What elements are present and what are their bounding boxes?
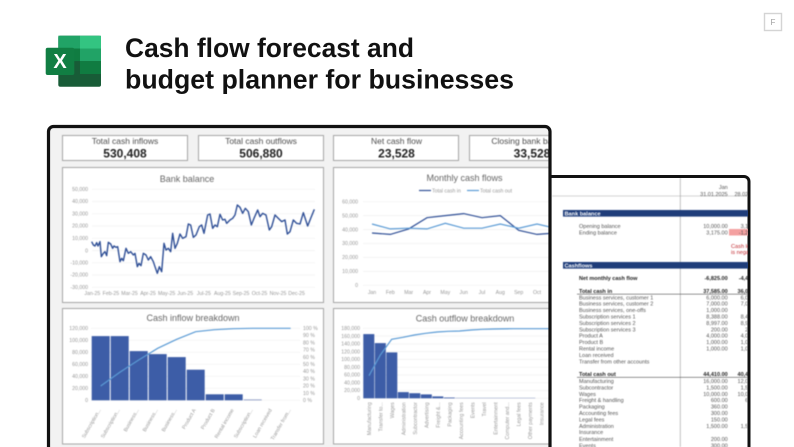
chart: bank balance line: Jul-25 (197, 291, 211, 297)
chart: monthly cash flows: Monthly cash flows (426, 173, 503, 183)
chart: cash inflow breakdown: Loan received (252, 408, 274, 439)
chart: bank balance line: -30,000 (70, 285, 88, 291)
icon: Excel logo: X (53, 51, 67, 73)
chart: monthly cash flows (334, 168, 574, 302)
table content: 10,000.00 (703, 224, 728, 230)
table content: Net monthly cash flow (579, 276, 638, 282)
chart: monthly cash flows: Oct (533, 290, 542, 296)
chart: bank balance line: Dec-25 (288, 291, 305, 297)
chart: bank balance line: 0 (85, 248, 88, 254)
chart: cash inflow breakdown: 90 % (303, 333, 315, 339)
table content: 3,175.00 (706, 231, 728, 237)
KPI: total cash outflows (198, 136, 324, 160)
chart: monthly cash flows: 40,000 (342, 227, 358, 233)
KPI: closing bank balance: 33,528 (514, 146, 551, 160)
chart: cash inflow breakdown: Business... (142, 408, 160, 433)
table content: Rental income (579, 347, 614, 353)
chart: cash inflow breakdown: Subscription... (81, 408, 103, 439)
chart: cash inflow breakdown (62, 308, 324, 444)
table content: Transfer from other accounts (579, 360, 650, 366)
chart: cash inflow breakdown: Transfer from... (270, 408, 293, 442)
chart: monthly cash flows: Sep (514, 290, 523, 296)
chart: cash outflow breakdown: Manufacturing (367, 402, 373, 435)
table content: Business services, customer 1 (579, 295, 653, 301)
chart: monthly cash flows: May (440, 290, 451, 296)
table content: 1,500.00 (706, 424, 728, 430)
chart: cash outflow breakdown: Entertainment (494, 402, 500, 435)
chart: bank balance line: Jan-25 (84, 291, 100, 297)
chart: monthly cash flows: Feb (386, 290, 395, 296)
chart: cash outflow breakdown: Other payments (528, 402, 534, 439)
chart: bank balance line: Oct-25 (252, 291, 267, 297)
chart: monthly cash flows: Apr (423, 290, 431, 296)
panel: budget table sheet (551, 176, 762, 447)
chart: bank balance line: 40,000 (72, 199, 88, 205)
table content: 1,000.00 (706, 347, 728, 353)
chart: monthly cash flows: 20,000 (342, 255, 358, 261)
chart: cash inflow breakdown: Business... (123, 408, 141, 433)
table content: is negat (731, 250, 751, 256)
table content: 8,388.00 (706, 314, 728, 320)
chart: cash outflow breakdown: 0 (357, 396, 360, 402)
table content: Manufacturing (579, 379, 614, 385)
table content: Entertainment (579, 437, 614, 443)
chart: cash inflow breakdown: Subscription... (100, 408, 122, 439)
table content: Loan received (579, 353, 614, 359)
chart: cash inflow breakdown: 10 % (303, 391, 315, 397)
table content: 600.00 (711, 398, 728, 404)
table content: 36,000.00 (738, 289, 762, 295)
chart: cash outflow breakdown: 20,000 (344, 388, 360, 394)
table content: 360.00 (711, 404, 728, 410)
table content: Packaging (579, 404, 605, 410)
chart: bank balance line: Feb-25 (103, 291, 119, 297)
chart: cash inflow breakdown: 20 % (303, 384, 315, 390)
chart: cash outflow breakdown: Cash outflow breakdown (416, 314, 514, 324)
chart: cash outflow breakdown: Packaging (448, 402, 454, 427)
KPI: total cash inflows: Total cash inflows (92, 136, 158, 146)
badge: F (764, 14, 782, 30)
table content: 8,400.00 (741, 314, 762, 320)
table content: Subscription services 3 (579, 327, 636, 333)
chart: cash inflow breakdown: 0 (85, 398, 88, 404)
chart: cash outflow breakdown: Travel (482, 402, 488, 417)
chart: cash outflow breakdown: Administration (402, 402, 408, 435)
table content: Total cash in (579, 289, 613, 295)
table content: Subcontractor (579, 386, 613, 392)
table content: 200.00 (711, 327, 728, 333)
table content: 4,000.00 (706, 334, 728, 340)
table content: 10,000.00 (738, 392, 762, 398)
table content: -1,285.00 (739, 231, 762, 237)
chart: cash inflow breakdown: Cash inflow breakdown (146, 313, 240, 323)
title (125, 33, 514, 94)
legend: Total cash in (432, 188, 461, 194)
chart: bank balance line: Sep-25 (233, 291, 249, 297)
chart: bank balance line: -20,000 (70, 273, 88, 279)
chart: bank balance line: 10,000 (72, 236, 88, 242)
table content: Freight & handling (579, 398, 624, 404)
table content: 8,900.00 (741, 321, 762, 327)
chart: cash outflow breakdown: 140,000 (341, 342, 360, 348)
table content: 300.00 (711, 411, 728, 417)
chart: bank balance line: Bank balance (160, 174, 214, 184)
table content: 8,997.00 (706, 321, 728, 327)
table content: Cashflows (564, 263, 592, 269)
table content: Business services, one-offs (579, 308, 646, 314)
chart: cash outflow breakdown: Accounting fees (459, 402, 465, 439)
table content: 7,000.00 (706, 302, 728, 308)
chart: monthly cash flows: Jul (479, 290, 485, 296)
chart: cash inflow breakdown: 0 % (303, 398, 312, 404)
chart: bank balance line: 50,000 (72, 187, 88, 193)
table content: Bank balance (564, 211, 601, 217)
table content: 1,000.00 (706, 308, 728, 314)
chart: cash outflow breakdown: Transfer to... (378, 402, 384, 432)
icon: Excel logo (46, 36, 101, 87)
table content: Business services, customer 2 (579, 302, 653, 308)
table content: -4,460.00 (739, 276, 762, 282)
chart: monthly cash flows: 10,000 (342, 269, 358, 275)
table content: Total cash out (579, 372, 616, 378)
table content: 10,000.00 (703, 392, 728, 398)
table content: 3,175.00 (741, 224, 762, 230)
table content: 6,000.00 (741, 295, 762, 301)
chart: cash inflow breakdown: Business... (161, 408, 179, 433)
table content: 600.00 (745, 398, 762, 404)
table content: Accounting fees (579, 411, 618, 417)
chart: cash inflow breakdown: 50 % (303, 362, 315, 368)
legend: Total cash out (480, 188, 513, 194)
chart: monthly cash flows: Mar (404, 290, 413, 296)
chart: cash inflow breakdown: 80,000 (72, 350, 88, 356)
chart: cash outflow breakdown: 120,000 (341, 349, 360, 355)
chart: monthly cash flows: 50,000 (342, 213, 358, 219)
chart: monthly cash flows: 0 (355, 283, 358, 289)
chart: cash inflow breakdown: 80 % (303, 340, 315, 346)
chart: cash inflow breakdown: 100,000 (69, 338, 88, 344)
KPI: net cash flow (334, 136, 458, 160)
table content: 200.00 (745, 327, 762, 333)
chart: cash outflow breakdown (334, 308, 574, 444)
table content: Product B (579, 340, 603, 346)
chart: cash outflow breakdown: 100,000 (341, 357, 360, 363)
KPI: net cash flow: Net cash flow (371, 136, 423, 146)
chart: cash inflow breakdown: Product B (200, 408, 217, 431)
chart: cash outflow breakdown: Wages (390, 402, 396, 418)
table content: 16,000.00 (703, 379, 728, 385)
chart: bank balance line: Apr-25 (140, 291, 156, 297)
table content: Legal fees (579, 418, 605, 424)
chart: cash outflow breakdown: Advertising (424, 402, 430, 428)
table content: 12,000.00 (738, 379, 762, 385)
chart: cash outflow breakdown: Freight &... (436, 402, 442, 428)
table content: Product A (579, 334, 603, 340)
chart: cash outflow breakdown: 160,000 (341, 334, 360, 340)
table content (552, 178, 762, 447)
chart: monthly cash flows: Aug (496, 290, 505, 296)
chart: bank balance line: Mar-25 (121, 291, 138, 297)
chart: cash inflow breakdown: 60 % (303, 355, 315, 361)
chart: cash inflow breakdown: 20,000 (72, 386, 88, 392)
table content: Insurance (579, 430, 603, 436)
legend (418, 188, 512, 193)
chart: cash outflow breakdown: 180,000 (341, 326, 360, 332)
table content: 40,460.00 (738, 372, 762, 378)
chart: cash outflow breakdown: Subcontractor (413, 402, 419, 435)
table content: Subscription services 1 (579, 314, 636, 320)
table content: 1,500.00 (706, 386, 728, 392)
chart: bank balance line: Nov-25 (270, 291, 286, 297)
KPI: total cash inflows: 530,408 (103, 146, 147, 160)
table content: Opening balance (579, 224, 621, 230)
table content: 1,000.00 (706, 340, 728, 346)
chart: cash outflow breakdown: 80,000 (344, 365, 360, 371)
badge: F: F (771, 18, 776, 27)
chart: bank balance line: Aug-25 (214, 291, 231, 297)
table content: 1,000.00 (741, 340, 762, 346)
title: budget planner for businesses (125, 64, 514, 94)
KPI: closing bank balance: Closing bank balance (491, 136, 573, 146)
chart: bank balance line: Jun-25 (177, 291, 193, 297)
chart: cash inflow breakdown: 40,000 (72, 374, 88, 380)
chart: cash inflow breakdown: 40 % (303, 369, 315, 375)
chart: cash inflow breakdown: 60,000 (72, 362, 88, 368)
table content: 37,585.00 (703, 289, 728, 295)
KPI: total cash inflows (62, 136, 188, 160)
KPI: total cash outflows: Total cash outflows (225, 136, 297, 146)
table content: Administration (579, 424, 614, 430)
chart: cash inflow breakdown: 70 % (303, 348, 315, 354)
table content: Ending balance (579, 231, 617, 237)
table content: Jan (719, 185, 728, 191)
table content: 150.00 (711, 418, 728, 424)
chart: cash inflow breakdown: Product A (181, 408, 198, 430)
chart: monthly cash flows: Jan (368, 290, 376, 296)
title: Cash flow forecast and (125, 33, 414, 63)
panel: dashboard frame (48, 126, 594, 447)
table content: 6,000.00 (706, 295, 728, 301)
chart: cash inflow breakdown: Subscription... (233, 408, 255, 439)
chart: bank balance line (62, 168, 324, 302)
chart: monthly cash flows: 30,000 (342, 241, 358, 247)
KPI: net cash flow: 23,528 (378, 146, 415, 160)
chart: cash outflow breakdown: Computer and... (505, 402, 511, 440)
table content: 44,410.00 (703, 372, 728, 378)
KPI: total cash outflows: 506,880 (239, 146, 283, 160)
chart: cash inflow breakdown: 30 % (303, 376, 315, 382)
chart: cash inflow breakdown: Rental income (214, 408, 236, 440)
chart: monthly cash flows: 60,000 (342, 199, 358, 205)
table content: 31.01.2025 (700, 192, 728, 198)
table content: 200.00 (711, 437, 728, 443)
table content: 7,000.00 (741, 302, 762, 308)
chart: cash inflow breakdown: 120,000 (69, 326, 88, 332)
chart: monthly cash flows: Jun (460, 290, 468, 296)
table content: 1,500.00 (741, 386, 762, 392)
table content: 1,000.00 (741, 347, 762, 353)
table content: Cash los (731, 244, 753, 250)
chart: cash outflow breakdown: 60,000 (344, 373, 360, 379)
chart: cash outflow breakdown: Events (470, 402, 476, 418)
chart: cash outflow breakdown: Legal fees (516, 402, 522, 426)
chart: bank balance line: 20,000 (72, 224, 88, 230)
table content: 4,000.00 (741, 334, 762, 340)
table content: 28.02.2025 (734, 192, 762, 198)
chart: bank balance line: -10,000 (70, 260, 88, 266)
table content: -6,825.00 (704, 276, 728, 282)
chart: cash inflow breakdown: 100 % (303, 326, 318, 332)
chart: bank balance line: May-25 (158, 291, 175, 297)
dashboard content (62, 136, 594, 444)
chart: cash outflow breakdown: 40,000 (344, 380, 360, 386)
KPI: closing bank balance (470, 136, 594, 160)
chart: bank balance line: 30,000 (72, 212, 88, 218)
table content: Subscription services 2 (579, 321, 636, 327)
table content: Wages (579, 392, 596, 398)
table content: 1,500.00 (741, 424, 762, 430)
chart: cash outflow breakdown: Insurance (540, 402, 546, 425)
